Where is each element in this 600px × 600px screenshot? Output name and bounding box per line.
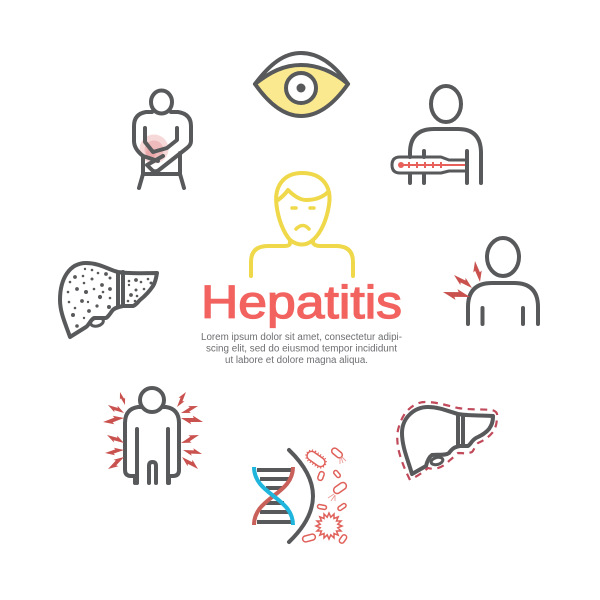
liver lobe loop [430, 456, 444, 466]
center person [251, 173, 353, 276]
torso [468, 283, 538, 324]
head [151, 90, 172, 114]
thermometer scale [401, 162, 465, 168]
icon: swollen liver [397, 402, 497, 480]
liver outline [60, 263, 157, 337]
pain bolts [102, 390, 204, 472]
description text: scing elit, sed do eiusmod tempor incididunt [206, 344, 397, 354]
thermometer [392, 157, 467, 173]
title: Hepatitis [201, 276, 402, 328]
icon: eye [255, 53, 348, 116]
description text: ut labore et dolore magna aliqua. [225, 355, 368, 366]
hair [278, 190, 328, 200]
description text: Lorem ipsum dolor sit amet, consectetur adipi- [201, 332, 402, 343]
pupil [296, 84, 306, 92]
torso [410, 129, 481, 183]
description text [201, 332, 402, 366]
liver dots [67, 268, 152, 328]
icon: man with shoulder pain [442, 238, 538, 324]
head [431, 86, 461, 122]
liver lobe loop [90, 316, 104, 328]
dashed swelling outline [397, 402, 497, 480]
icon: cirrhotic liver [60, 263, 157, 337]
body outline [134, 112, 191, 188]
iris [286, 73, 316, 103]
icon: man with stomach pain [134, 90, 191, 188]
icon: man with body aches [102, 388, 204, 483]
head [140, 388, 164, 412]
head [487, 238, 519, 276]
DNA blue strand [254, 467, 293, 525]
DNA red strand [254, 467, 293, 525]
thermometer bulb [398, 162, 404, 168]
icon: DNA and germs [254, 447, 348, 544]
pain bolts [442, 260, 484, 302]
barrier arc [289, 450, 313, 542]
eyebrow arc [255, 53, 348, 84]
body [125, 407, 179, 483]
DNA rungs [257, 470, 293, 522]
shoulders [251, 240, 353, 276]
germs [302, 447, 348, 544]
icon: man with thermometer [392, 86, 481, 183]
mouth [296, 226, 309, 229]
pain glow [140, 134, 168, 164]
eyes [292, 206, 314, 210]
liver outline [402, 407, 493, 474]
face [276, 173, 330, 244]
eye shape [255, 65, 348, 116]
